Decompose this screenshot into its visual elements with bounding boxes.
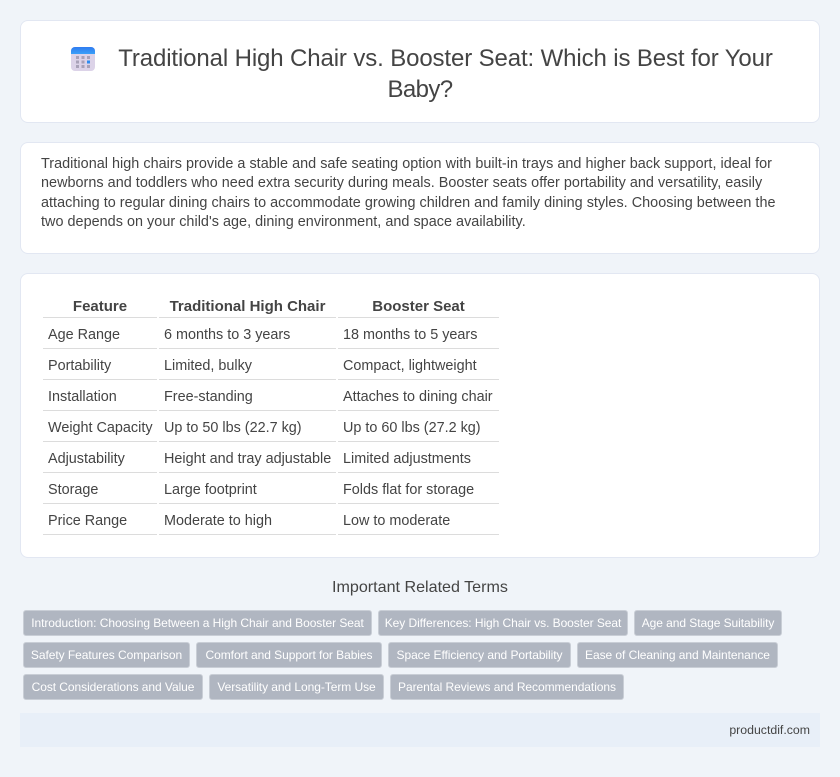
panel: intro text [20, 142, 820, 254]
row: storage: Large footprint [164, 482, 257, 498]
row: age range [48, 327, 477, 343]
row: adjustability [48, 451, 471, 467]
row: adjustability: Limited adjustments [343, 451, 471, 467]
row: portability: Limited, bulky [164, 358, 252, 374]
tag: Age and Stage Suitability [642, 616, 774, 630]
comparison table [43, 298, 499, 535]
row: age range: 18 months to 5 years [343, 327, 477, 343]
intro paragraph: newborns and toddlers who need extra security during meals. Booster seats offer portability and versatility, easily [41, 175, 762, 191]
tag: Comfort and Support for Babies [206, 648, 372, 662]
footer bar [20, 713, 820, 747]
title: Traditional High Chair vs. Booster Seat: Which is Best for Your [118, 45, 773, 72]
row: installation: Installation [48, 389, 117, 405]
row: adjustability: Height and tray adjustable [164, 451, 331, 467]
icon: calendar [71, 47, 95, 71]
tag [209, 674, 384, 700]
tag [196, 642, 382, 668]
intro paragraph [41, 156, 776, 230]
row: price range: Price Range [48, 513, 127, 529]
tag group: related terms [23, 610, 782, 700]
row: age range: Age Range [48, 327, 120, 343]
row: portability [48, 358, 477, 374]
intro paragraph: attaching to regular dining chairs to accommodate growing children and family dining styles. Choosing between the [41, 195, 776, 211]
row: storage: Storage [48, 482, 98, 498]
row: portability: Compact, lightweight [343, 358, 477, 374]
table header: Feature [73, 298, 127, 315]
table header: Traditional High Chair [170, 298, 325, 315]
title [118, 45, 773, 103]
footer source: productdif.com [729, 723, 810, 737]
tag [634, 610, 782, 636]
row: storage: Folds flat for storage [343, 482, 474, 498]
row: age range: 6 months to 3 years [164, 327, 290, 343]
tag: Safety Features Comparison [31, 648, 182, 662]
panel: title card [20, 20, 820, 123]
tag [23, 642, 190, 668]
row: installation: Free-standing [164, 389, 253, 405]
row: price range: Moderate to high [164, 513, 272, 529]
tag: Space Efficiency and Portability [397, 648, 562, 662]
tag [390, 674, 624, 700]
tag [23, 610, 372, 636]
tag [378, 610, 628, 636]
tag: Cost Considerations and Value [32, 680, 194, 694]
row: weight capacity: Up to 60 lbs (27.2 kg) [343, 420, 481, 436]
tag: Introduction: Choosing Between a High Chair and Booster Seat [31, 616, 364, 630]
intro paragraph: Traditional high chairs provide a stable and safe seating option with built-in trays and higher back support, ideal for [41, 156, 772, 172]
table header: Booster Seat [372, 298, 465, 315]
intro paragraph: two depends on your child's age, dining environment, and space availability. [41, 214, 526, 230]
tag: Parental Reviews and Recommendations [398, 680, 616, 694]
row: adjustability: Adjustability [48, 451, 125, 467]
row: weight capacity: Weight Capacity [48, 420, 153, 436]
tag: Versatility and Long-Term Use [217, 680, 376, 694]
row: storage [48, 482, 474, 498]
heading: related terms: Important Related Terms [332, 578, 508, 596]
row: price range [48, 513, 450, 529]
row: price range: Low to moderate [343, 513, 450, 529]
tag: Key Differences: High Chair vs. Booster Seat [385, 616, 621, 630]
table header [73, 298, 465, 315]
tag: Ease of Cleaning and Maintenance [585, 648, 770, 662]
row: weight capacity [48, 420, 481, 436]
panel: comparison table [20, 273, 820, 558]
tag [388, 642, 571, 668]
title: Baby? [387, 76, 453, 103]
row: portability: Portability [48, 358, 111, 374]
row: installation: Attaches to dining chair [343, 389, 493, 405]
tag [23, 674, 203, 700]
row: installation [48, 389, 493, 405]
row: weight capacity: Up to 50 lbs (22.7 kg) [164, 420, 302, 436]
tag [577, 642, 778, 668]
